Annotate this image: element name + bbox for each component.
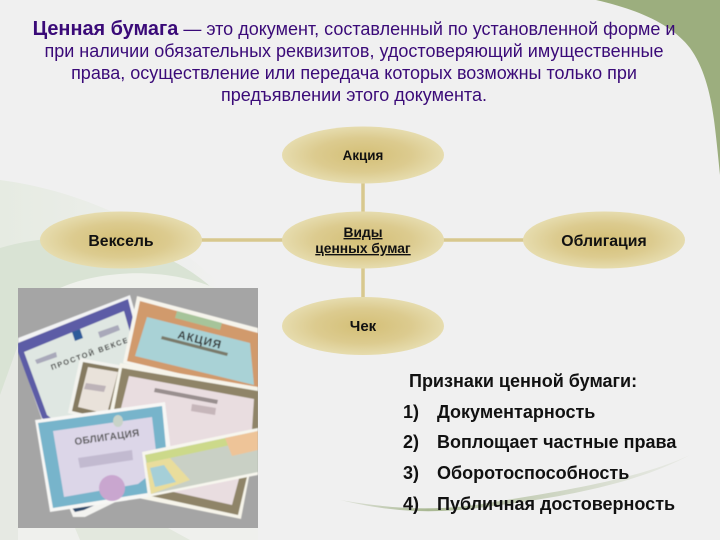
node: Чек — [282, 297, 444, 355]
title text — [33, 18, 675, 105]
document: облигация — [35, 402, 172, 512]
document: акция — [123, 296, 258, 395]
list item 2: 2) — [403, 432, 419, 452]
document: lower sliver — [66, 490, 140, 517]
node: Акция: Акция — [343, 148, 383, 163]
list item 2 — [403, 432, 676, 452]
list: features of a security: Документарность — [437, 402, 595, 422]
node: Вексель: Вексель — [88, 233, 154, 250]
list item 1: 1) — [403, 402, 419, 422]
node: Виды ценных бумаг: ценных бумаг — [315, 241, 411, 256]
node: Вексель — [40, 212, 202, 268]
list: features of a security: Оборотоспособность — [437, 463, 629, 483]
list: features of a security: Публичная достоверность — [437, 494, 675, 514]
photo background — [18, 288, 258, 528]
swirl: bottom left pale green — [0, 180, 690, 540]
node: Акция — [282, 126, 444, 184]
list item 4 — [403, 494, 675, 514]
document: вексель: ПРОСТОЙ ВЕКСЕЛЬ — [50, 331, 143, 372]
photo: collage of securities — [18, 288, 258, 528]
document: вексель — [18, 295, 155, 440]
title text: предъявлении этого документа. — [221, 85, 487, 105]
title text: при наличии обязательных реквизитов, удостоверяющий имущественные — [44, 41, 664, 61]
document: акция: АКЦИЯ — [176, 329, 223, 352]
node: Чек: Чек — [350, 318, 377, 335]
document: small certificate — [68, 358, 124, 425]
node: Виды ценных бумаг: Виды — [344, 225, 382, 240]
title text: Ценная бумага — это документ, составленный по установленной форме и — [33, 18, 675, 40]
node: Виды ценных бумаг — [282, 212, 444, 268]
node: Облигация: Облигация — [561, 233, 647, 250]
connectors — [200, 180, 525, 300]
list item 3: 3) — [403, 463, 419, 483]
document: сертификат — [108, 363, 258, 519]
list item 4: 4) — [403, 494, 419, 514]
corner: top right green — [596, 0, 720, 175]
list: features of a security: Воплощает частные права — [437, 432, 676, 452]
list item 3 — [403, 463, 629, 483]
diagram: types of securities — [40, 126, 685, 355]
document: облигация: ОБЛИГАЦИЯ — [74, 428, 140, 448]
node: Облигация — [523, 212, 685, 268]
list item 1 — [403, 402, 595, 422]
title text: права, осуществление или передача которых возможны только при — [71, 63, 637, 83]
list heading: Признаки ценной бумаги: — [409, 371, 637, 391]
document: чек — [142, 428, 258, 497]
